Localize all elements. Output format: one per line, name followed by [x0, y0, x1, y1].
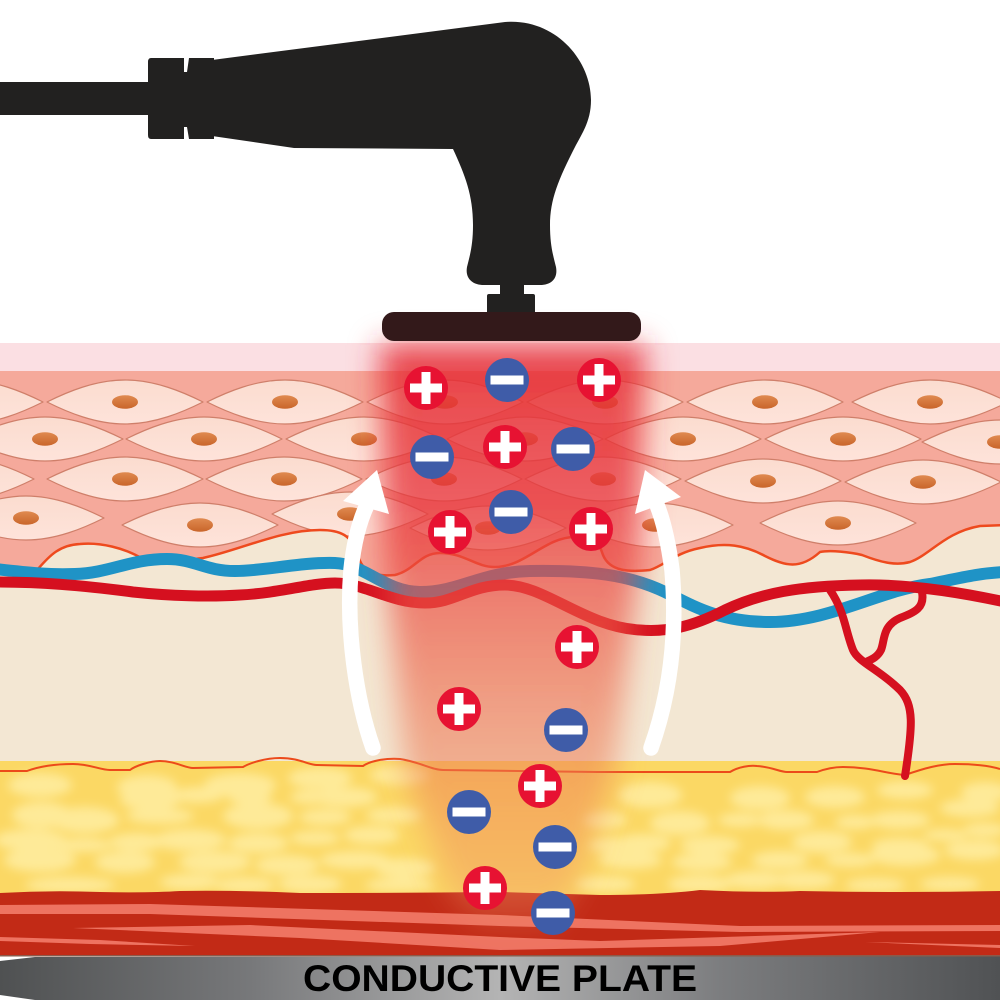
layer: muscle	[0, 890, 1000, 956]
red artery with branches	[0, 582, 1000, 776]
applicator head	[382, 312, 641, 341]
epidermis boundary line	[38, 525, 1000, 575]
layer: subcutaneous fat	[0, 761, 1000, 895]
applicator stem	[500, 284, 524, 296]
arrow: left up	[343, 470, 389, 748]
fat boundary line	[0, 758, 1000, 775]
epidermal cells	[0, 380, 1000, 550]
ions	[404, 358, 621, 935]
connector collar	[148, 58, 214, 139]
negative ions	[410, 358, 595, 935]
layer: dermis	[0, 525, 1000, 770]
arrow: right up	[635, 470, 681, 748]
muscle fibres	[0, 904, 1000, 950]
blue vein	[0, 559, 1000, 622]
handle body	[212, 22, 591, 285]
layer: stratum corneum	[0, 343, 1000, 371]
red current beam	[380, 345, 645, 930]
handpiece	[0, 22, 641, 341]
conductive plate	[0, 955, 1000, 1000]
layer: epidermis	[0, 371, 1000, 611]
cable	[0, 82, 150, 115]
positive ions	[404, 358, 621, 910]
plate label: CONDUCTIVE PLATE	[303, 958, 697, 999]
